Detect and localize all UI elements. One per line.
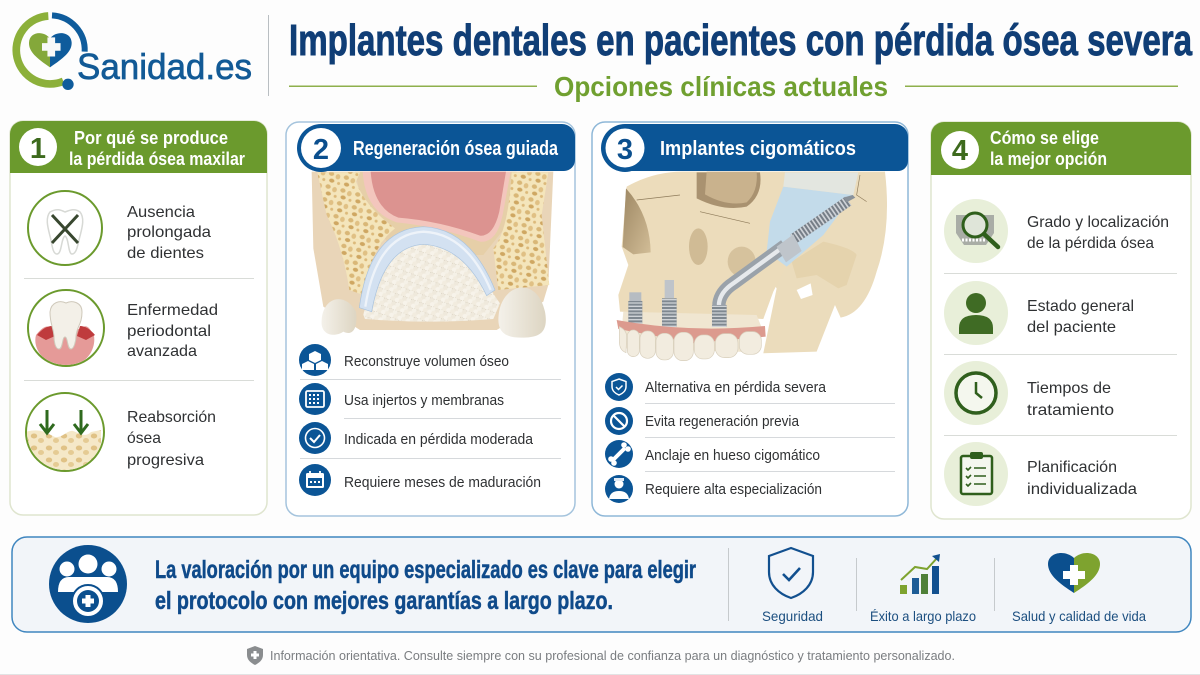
text: periodontal disease: periodontal bbox=[127, 323, 211, 340]
heading: zygomatic: Implantes cigomáticos bbox=[660, 138, 856, 160]
number badge 1 bbox=[19, 128, 57, 166]
text: patient: del paciente bbox=[1027, 319, 1116, 336]
icon: patient bbox=[944, 281, 1008, 345]
icon: bone bbox=[605, 440, 633, 468]
icon: bone resorption bbox=[25, 393, 104, 475]
text: zygomatic anchor: Anclaje en hueso cigomático bbox=[645, 448, 820, 464]
icon: clipboard bbox=[944, 442, 1008, 506]
icon: specialist bbox=[605, 475, 633, 503]
number badge 4 bbox=[941, 131, 979, 169]
number badge 1: 1 bbox=[30, 133, 46, 165]
text: periodontal disease: avanzada bbox=[127, 343, 197, 360]
icon: medical team bbox=[49, 545, 127, 623]
text: time: Tiempos de bbox=[1027, 380, 1111, 397]
benefit: safety bbox=[762, 548, 823, 624]
panel: guided bone regeneration bbox=[286, 122, 575, 516]
text: tooth absence: Ausencia bbox=[127, 204, 195, 221]
text: tooth absence: de dientes bbox=[127, 245, 204, 262]
benefit: safety: Seguridad bbox=[762, 608, 823, 624]
icon: prohibited bbox=[605, 407, 633, 435]
text: key message: el protocolo con mejores garantías a largo plazo. bbox=[155, 587, 613, 615]
text: tooth absence: prolongada bbox=[127, 224, 211, 241]
logo: Sanidad.es bbox=[77, 46, 252, 87]
text: moderate loss: Indicada en pérdida moderada bbox=[344, 432, 534, 448]
text: periodontal disease: Enfermedad bbox=[127, 302, 218, 319]
number badge 3 bbox=[601, 124, 649, 172]
panel: choosing the best option bbox=[931, 122, 1191, 519]
icon: shield bbox=[605, 373, 633, 401]
subtitle: Opciones clínicas actuales bbox=[554, 71, 888, 102]
text: avoids regeneration: Evita regeneración previa bbox=[645, 414, 800, 430]
text: bone resorption: progresiva bbox=[127, 452, 204, 469]
heading: choosing bbox=[990, 128, 1107, 169]
number badge 2 bbox=[297, 124, 345, 172]
icon: clock bbox=[944, 361, 1008, 425]
heading: choosing: Cómo se elige bbox=[990, 128, 1099, 148]
icon: calendar bbox=[299, 464, 331, 496]
number badge 4: 4 bbox=[952, 135, 968, 167]
panel: key message bar bbox=[12, 537, 1191, 632]
text: patient: Estado general bbox=[1027, 298, 1134, 315]
text: time: tratamiento bbox=[1027, 402, 1114, 419]
benefit: long-term success bbox=[870, 554, 976, 624]
text: key message: La valoración por un equipo especializado es clave para elegir bbox=[155, 556, 696, 584]
text: grafts: Usa injertos y membranas bbox=[344, 393, 504, 409]
number badge 3: 3 bbox=[617, 134, 633, 166]
footer note: Información orientativa. Consulte siempre con su profesional de confianza para un diagnóstico y tratamiento personalizado. bbox=[270, 649, 955, 663]
icon: grafts bbox=[299, 383, 331, 415]
logo bbox=[16, 15, 252, 90]
text: patient bbox=[1027, 298, 1134, 336]
text: planning: individualizada bbox=[1027, 481, 1137, 498]
heading: causes: la pérdida ósea maxilar bbox=[69, 149, 245, 169]
text: bone resorption: Reabsorción bbox=[127, 409, 216, 426]
text: volume: Reconstruye volumen óseo bbox=[344, 354, 509, 370]
icon: periodontal disease bbox=[28, 290, 104, 366]
benefit: health and quality of life bbox=[1012, 553, 1146, 624]
heading: regeneration: Regeneración ósea guiada bbox=[353, 138, 559, 160]
panel: causes bbox=[10, 121, 267, 515]
number badge 2: 2 bbox=[313, 134, 329, 166]
illustration: skull with zygomatic implant bbox=[617, 172, 887, 361]
icon: x-ray magnifier bbox=[944, 199, 1008, 263]
text: planning bbox=[1027, 459, 1137, 498]
text: time bbox=[1027, 380, 1114, 419]
heading: choosing: la mejor opción bbox=[990, 149, 1107, 169]
text: degree: de la pérdida ósea bbox=[1027, 235, 1154, 252]
text: planning: Planificación bbox=[1027, 459, 1117, 476]
heading: causes: Por qué se produce bbox=[74, 128, 228, 148]
text: degree: Grado y localización bbox=[1027, 214, 1169, 231]
text: bone resorption: ósea bbox=[127, 430, 161, 447]
icon: volume bbox=[299, 344, 331, 376]
benefit: health and quality of life: Salud y calidad de vida bbox=[1012, 608, 1146, 624]
text: key message bbox=[155, 556, 696, 615]
panel: zygomatic implants bbox=[592, 122, 908, 516]
icon: missing tooth bbox=[28, 191, 102, 265]
text: bone resorption bbox=[127, 409, 216, 469]
icon: check bbox=[299, 422, 331, 454]
text: specialisation: Requiere alta especialización bbox=[645, 482, 822, 498]
text: periodontal disease bbox=[127, 302, 218, 360]
text: tooth absence bbox=[127, 204, 211, 262]
text: maturation: Requiere meses de maduración bbox=[344, 475, 541, 491]
illustration: guided bone regeneration bbox=[312, 172, 553, 338]
heading: causes bbox=[69, 128, 245, 169]
text: degree bbox=[1027, 214, 1169, 252]
text: severe loss: Alternativa en pérdida severa bbox=[645, 380, 827, 396]
benefit: long-term success: Éxito a largo plazo bbox=[870, 608, 976, 624]
